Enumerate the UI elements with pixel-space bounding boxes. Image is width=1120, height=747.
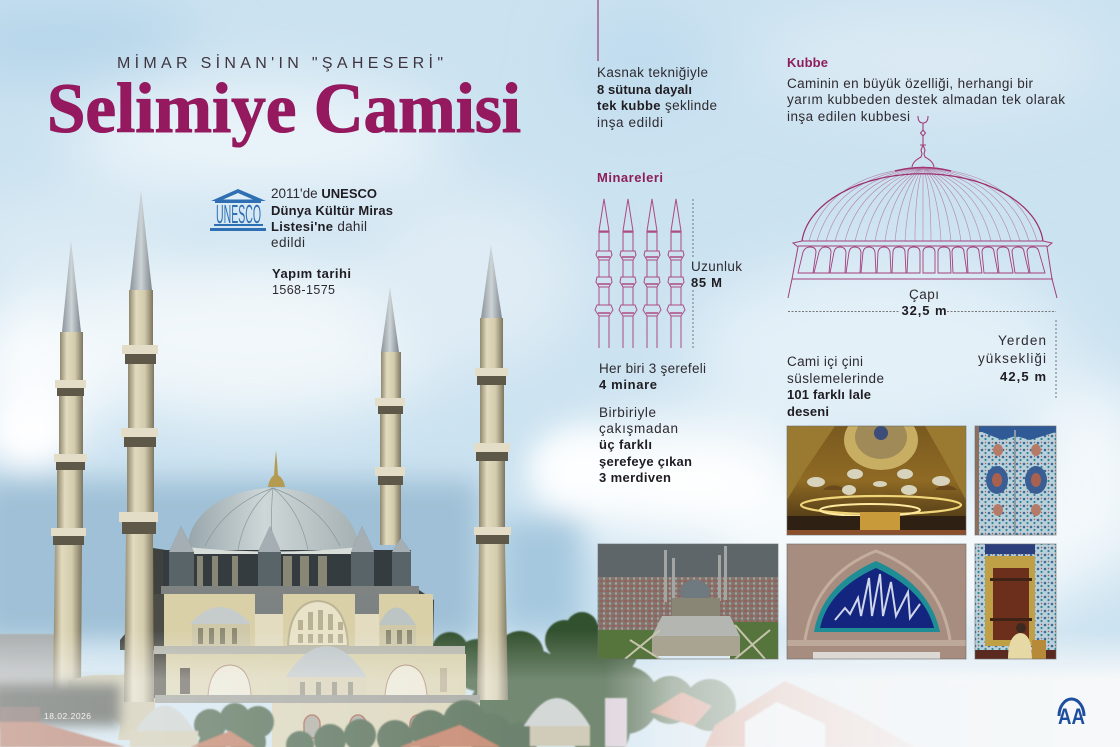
text: construction date	[272, 266, 351, 297]
mosque: minaret centre right	[375, 287, 405, 545]
text: UNESCO	[216, 199, 261, 229]
text: drum technique: tek kubbe şeklinde	[597, 98, 717, 113]
photo: calligraphy lunette	[787, 544, 966, 659]
photo frames	[598, 426, 1056, 659]
text: three staircases note: 3 merdiven	[599, 470, 671, 485]
text: minaret length: 85 M	[691, 275, 722, 290]
mosque: dark rear silhouette	[120, 548, 434, 650]
distant land haze	[0, 634, 60, 690]
text: tulip patterns: 101 farklı lale	[787, 387, 871, 402]
text: construction date: Yapım tarihi	[272, 266, 351, 281]
text: dome diameter: Çapı	[909, 287, 939, 302]
text: drum technique: 8 sütuna dayalı	[597, 82, 692, 97]
text: construction date: 1568-1575	[272, 283, 335, 297]
mosque: lower walls	[160, 654, 466, 698]
text: drum technique: Kasnak tekniğiyle	[597, 65, 708, 80]
text: three staircases note: üç farklı	[599, 437, 652, 452]
dotted height line: minarets	[692, 199, 694, 348]
photo: interior dome	[787, 426, 966, 535]
text: tulip patterns: deseni	[787, 404, 829, 419]
text: minaret length	[691, 259, 742, 290]
mosque: upper walls	[154, 594, 433, 649]
photo: aerial view	[598, 544, 778, 659]
heading: dome: Kubbe	[787, 55, 828, 70]
text: drum technique: inşa edildi	[597, 115, 663, 130]
text: UNESCO note	[271, 186, 393, 250]
text: three staircases note: Birbiriyle	[599, 405, 656, 420]
text: ground height: 42,5 m	[1000, 369, 1046, 384]
dotted height line: dome	[1055, 320, 1057, 398]
text: dome diameter	[902, 287, 946, 318]
text: dome description: yarım kubbeden destek almadan tek olarak	[787, 92, 1065, 107]
icon: AA logo: AA	[1058, 704, 1085, 729]
foreground: small domes, trees and rooftops	[0, 681, 915, 747]
mosque: minaret far right	[474, 245, 511, 700]
text: drum technique	[597, 65, 717, 130]
mosque: drum	[163, 550, 411, 588]
divider line top	[597, 0, 599, 61]
mosque: lower roof	[155, 695, 480, 703]
text: four minarets note: 4 minare	[599, 377, 657, 392]
text: dome diameter: 32,5 m	[902, 303, 946, 318]
icon: four minarets	[595, 199, 685, 348]
mosque: lower arch windows	[208, 665, 251, 696]
mosque: left half dome	[190, 607, 251, 624]
dotted diameter line	[788, 310, 1056, 312]
text: four minarets note	[599, 361, 706, 392]
mosque: left wing	[68, 660, 155, 725]
mosque: central arch window	[288, 601, 348, 646]
text: tulip patterns: Cami içi çini	[787, 354, 863, 369]
text: ground height: yüksekliği	[978, 351, 1046, 366]
mosque: minaret centre left	[118, 190, 158, 740]
bottom fade overlay	[0, 630, 1120, 747]
text: ground height	[978, 333, 1046, 384]
mosque: main dome	[188, 488, 358, 552]
text: four minarets note: Her biri 3 şerefeli	[599, 361, 706, 376]
heading: minarets: Minareleri	[597, 170, 663, 185]
mosque: lower centre dome	[286, 646, 367, 677]
text: dome description	[787, 76, 1065, 124]
text: tulip patterns	[787, 354, 884, 419]
illustration: dome line drawing	[788, 116, 1057, 298]
mosque: dome ribs	[205, 488, 340, 552]
text: ground height: Yerden	[998, 333, 1046, 348]
text: minaret length: Uzunluk	[691, 259, 742, 274]
mosque: right half dome	[379, 608, 416, 625]
mosque: background trees right	[432, 612, 736, 747]
date stamp: 18.02.2026	[44, 711, 91, 721]
text: three staircases note: çakışmadan	[599, 421, 678, 436]
mosque: main building	[68, 450, 480, 747]
mosque: dome finial	[268, 450, 285, 487]
text: UNESCO note: 2011'de UNESCO	[271, 186, 377, 201]
text: UNESCO note: Listesi'ne dahil	[271, 219, 367, 234]
text: dome description: Caminin en büyük özelliği, herhangi bir	[787, 76, 1034, 91]
text: dome description: inşa edilen kubbesi	[787, 109, 910, 124]
text: three staircases note: şerefeye çıkan	[599, 454, 692, 469]
mosque: minaret far left	[51, 240, 87, 690]
mosque: corner turrets	[169, 526, 411, 588]
photo: door and worshipper	[975, 544, 1056, 659]
subtitle: MİMAR SİNAN'IN "ŞAHESERİ"	[117, 53, 443, 72]
foreground: left shadowed trees	[0, 684, 120, 726]
title: Selimiye Camisi	[47, 70, 521, 148]
mosque: bottom wall	[272, 703, 480, 747]
photo: tile panel	[975, 426, 1056, 535]
text: tulip patterns: süslemelerinde	[787, 371, 884, 386]
text: UNESCO note: edildi	[271, 235, 305, 250]
icon: UNESCO temple	[210, 189, 266, 231]
text: UNESCO note: Dünya Kültür Miras	[271, 203, 393, 218]
mosque: mid roof	[154, 646, 465, 654]
dome finial	[912, 116, 934, 167]
text: three staircases note	[599, 405, 692, 485]
